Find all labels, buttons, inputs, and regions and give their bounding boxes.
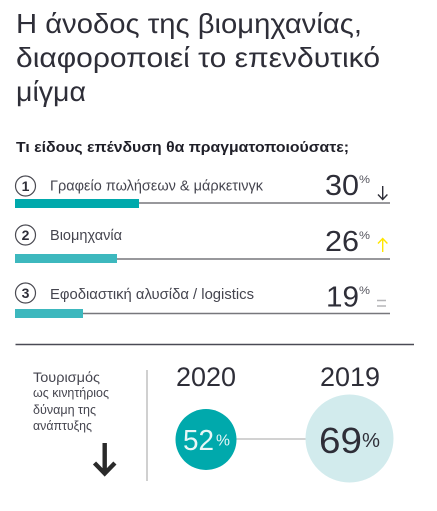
circle 2019: 69%: % <box>362 430 380 452</box>
year 2019: 2019 <box>320 362 380 392</box>
tourism text <box>33 369 109 433</box>
value 3: 19 <box>326 282 359 314</box>
title <box>16 8 380 107</box>
badge 1 <box>16 176 36 196</box>
tourism text: δύναμη της <box>33 402 96 417</box>
row 2: industry <box>15 225 390 263</box>
label 1: Γραφείο πωλήσεων & μάρκετινγκ <box>50 178 264 194</box>
value 3: % <box>359 285 370 297</box>
title: διαφοροποιεί το επενδυτικό <box>16 42 380 73</box>
bar 3 <box>15 309 83 318</box>
circle 2020: 52%: 52 <box>183 425 214 457</box>
icon: up arrow <box>378 238 387 252</box>
tourism text: ως κινητήριος <box>33 385 109 400</box>
row 3: supply chain <box>15 282 390 318</box>
value 1: 30 <box>325 170 359 202</box>
circle 2020: 52%: % <box>216 432 230 450</box>
circle 2019: 69%: 69 <box>319 420 362 461</box>
badge 3 <box>16 283 36 303</box>
circle 2019: 69% <box>306 394 394 482</box>
icon: equals sign <box>377 300 386 306</box>
title: μίγμα <box>16 76 86 107</box>
tourism text: Τουρισμός <box>33 369 100 385</box>
year 2020: 2020 <box>176 362 236 392</box>
circle 2020: 52% <box>176 409 236 470</box>
label 2: Βιομηχανία <box>50 228 122 244</box>
bar 1 <box>15 199 139 208</box>
value 1: % <box>359 174 370 186</box>
badge 2 <box>16 225 36 245</box>
value 2: % <box>359 230 370 242</box>
icon: down arrow <box>378 186 387 200</box>
badge 1: 1 <box>22 178 30 194</box>
label 3: Εφοδιαστική αλυσίδα / logistics <box>50 287 254 303</box>
title: Η άνοδος της βιομηχανίας, <box>16 8 362 39</box>
bar 2 <box>15 254 117 263</box>
value 2: 26 <box>325 226 359 258</box>
badge 3: 3 <box>22 285 30 301</box>
subheading: Τι είδους επένδυση θα πραγματοποιούσατε; <box>16 139 349 156</box>
badge 2: 2 <box>22 227 30 243</box>
tourism text: ανάπτυξης <box>33 418 92 433</box>
row 1: sales and marketing office <box>15 170 390 208</box>
icon: large down arrow <box>94 443 115 474</box>
